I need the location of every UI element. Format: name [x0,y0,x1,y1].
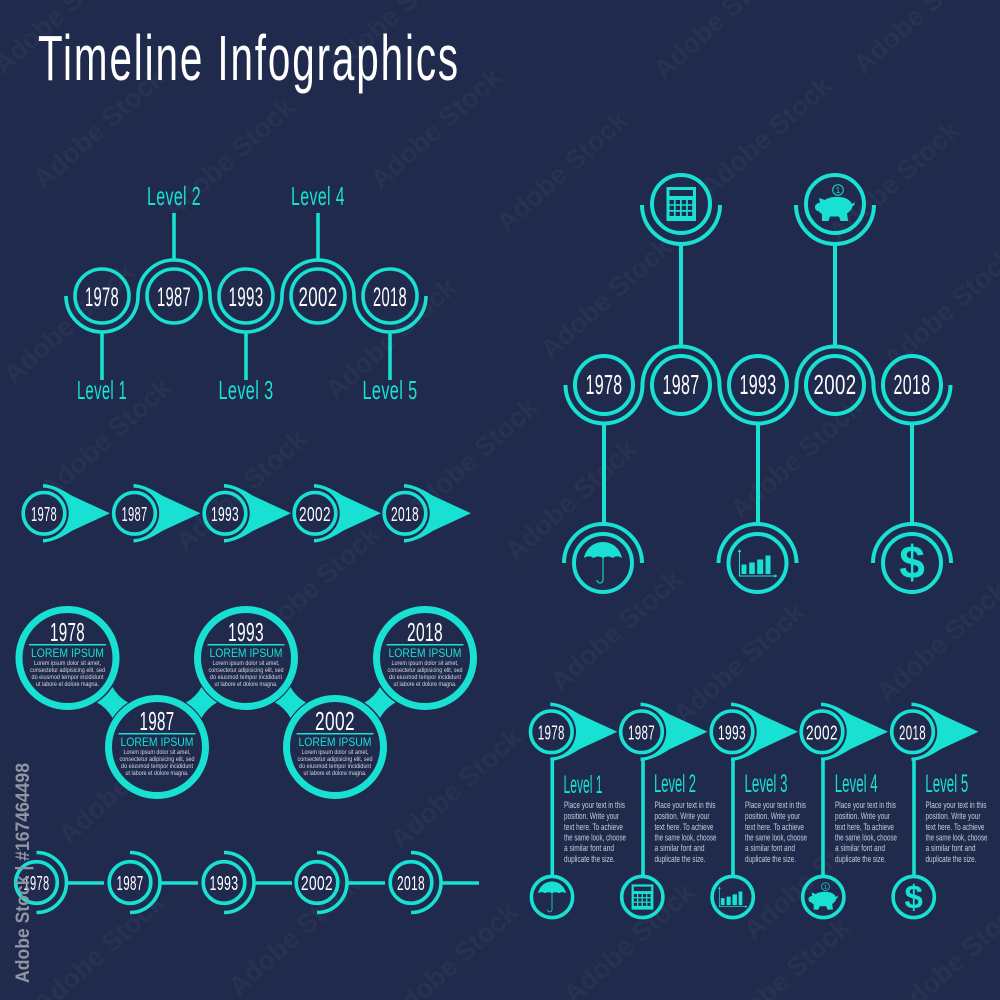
body text: position. Write your [564,811,619,822]
arrow 2018 [892,702,978,761]
year 1978 [575,356,633,414]
column 5 [892,702,988,918]
body text: the same look, choose [654,832,716,844]
stem [641,758,645,876]
arrow 2018: 2018 [391,504,419,526]
arrow 1978: 1978 [31,504,57,526]
column 4 [801,702,897,918]
circle 1987: consectetur adipisicing elit, sed [120,756,195,763]
circle 2018: 2018 [407,617,443,647]
title: Timeline Infographics [38,22,460,94]
year 1993: 1993 [740,369,776,400]
circle 1978: consectetur adipisicing elit, sed [30,667,105,674]
body text: a similar font and [926,843,976,854]
stock id watermark: Adobe Stock | #167464498 [12,763,34,983]
circle 1987: 1987 [140,706,174,736]
arrow 1978 [23,484,110,543]
circle 1978: Lorem ipsum dolor sit amet, [34,660,101,667]
arrow 2018: 2018 [899,722,926,744]
wave line [66,260,426,332]
stem [731,758,735,876]
watermark pattern: Adobe Stock [35,371,178,505]
circle 2018: ut labore et dolore magna. [394,681,457,688]
watermark pattern: Adobe Stock [223,868,366,1000]
body text [926,800,988,865]
year 1987 [147,269,201,323]
panel: arrow timeline [23,484,471,543]
icon: calculator [622,876,663,918]
icon: umbrella [531,876,573,918]
year 1987 [652,356,710,414]
arrow 1987: 1987 [122,504,148,526]
circle 2002: ut labore et dolore magna. [304,770,367,777]
circle 2018: do eiusmod tempor incididunt [389,674,461,681]
watermark pattern: Adobe Stock [725,391,868,525]
column 2 [621,702,716,918]
circle 2018: consectetur adipisicing elit, sed [388,667,463,674]
circle 2002: LOREM IPSUM [298,735,372,749]
year 1993: 1993 [228,282,264,312]
circle 1987: ut labore et dolore magna. [126,770,189,777]
node 1987 [109,852,160,912]
level labels: Level 2 [147,181,201,211]
circle 1993 [198,610,294,706]
year 1993 [219,269,273,323]
year 1978 [75,269,129,323]
arrow 2002 [294,484,381,543]
arrow 2002: 2002 [299,504,331,526]
body text: duplicate the size. [654,854,706,865]
level labels: Level 4 [291,181,345,211]
year 2002 [291,269,345,323]
body text [745,800,807,865]
watermark pattern: Adobe Stock [53,716,196,850]
watermark pattern: Adobe Stock [491,104,634,238]
watermark pattern: Adobe Stock [365,61,508,195]
panel: arrow timeline with text [530,702,988,918]
body text: a similar font and [654,843,704,854]
node 1978 [16,852,66,912]
body text: position. Write your [745,811,800,822]
body text: duplicate the size. [835,854,886,865]
panel: wave timeline with levels [66,181,426,405]
node 2002: 2002 [301,873,333,895]
body text: the same look, choose [745,832,807,844]
wave line [566,346,950,424]
body text: Place your text in this [835,800,896,811]
circle 1993: Lorem ipsum dolor sit amet, [212,660,280,667]
circle 2018 [376,610,474,706]
node 1978: 1978 [24,873,50,895]
connectors [604,245,912,524]
body text: a similar font and [835,843,885,854]
body text: duplicate the size. [745,854,796,865]
connector diamonds [97,687,396,718]
watermark pattern: Adobe Stock [738,811,881,945]
icon: bar chart [712,876,753,918]
year 1993 [729,356,787,414]
circle 1993: ut labore et dolore magna. [214,681,278,688]
circle 1978: 1978 [50,617,85,647]
level labels: Level 1 [77,375,127,405]
body text [835,800,897,865]
body text: text here. To achieve [835,822,894,833]
connectors [102,213,390,380]
year 2002 [806,356,864,414]
watermark pattern: Adobe Stock [535,231,678,365]
column 3 [711,702,807,918]
icon: dollar: $ [899,536,925,588]
body text: duplicate the size. [564,854,615,865]
watermark pattern: Adobe Stock [668,596,811,730]
circle 1987: Lorem ipsum dolor sit amet, [124,749,191,756]
panel: wave timeline with icons [564,175,951,592]
arrow 1978: 1978 [538,722,565,744]
heading: Level 3 [744,770,788,798]
body text: position. Write your [835,811,890,822]
heading: Level 2 [654,770,696,798]
level labels: Level 3 [218,375,274,405]
body text: position. Write your [654,811,710,822]
arrow 1987: 1987 [628,722,655,744]
watermark pattern: Adobe Stock [823,114,966,248]
year 1978: 1978 [586,369,622,400]
watermark pattern: Adobe Stock [158,91,301,225]
circle 1993: 1993 [228,617,264,647]
body text: the same look, choose [564,832,626,844]
icon: dollar [893,876,934,918]
level labels [77,181,418,405]
body text: the same look, choose [835,832,897,844]
body text: text here. To achieve [745,822,804,833]
icon: piggy bank [796,175,874,244]
stem [912,758,916,876]
node 2018: 2018 [397,873,425,895]
stem [821,758,825,876]
watermark pattern: Adobe Stock [500,433,643,567]
body text: a similar font and [564,843,614,854]
circle 1987 [108,698,206,796]
circle 2018: Lorem ipsum dolor sit amet, [392,660,459,667]
column 1 [530,702,626,918]
arrow 2002: 2002 [806,722,838,744]
body text: duplicate the size. [926,854,976,865]
panel: text circles [19,610,474,796]
icon: dollar [873,524,951,592]
node 1993: 1993 [210,873,238,895]
arrow 1993 [204,484,291,543]
year 2018 [883,356,941,414]
watermark pattern: Adobe Stock [545,563,688,697]
circle 2002 [286,698,384,796]
circle 1978 [19,610,116,706]
connecting lines [67,881,479,885]
watermark pattern: Adobe Stock [320,271,463,405]
arrow 1987 [621,702,708,761]
column 1: Level 1 [564,771,602,799]
watermark pattern: Adobe Stock [401,391,544,525]
arrow 1987 [114,484,200,543]
year 2018: 2018 [373,282,407,312]
circle 1978: do eiusmod tempor incididunt [32,674,104,681]
circle 1978: ut labore et dolore magna. [36,681,99,688]
icon: dollar: $ [905,878,923,916]
circle 2018: LOREM IPSUM [388,646,462,660]
arrow 1993 [711,702,798,761]
circle 1987: LOREM IPSUM [120,735,194,749]
year 2002: 2002 [298,282,338,312]
node 1987: 1987 [116,873,144,895]
year 1987: 1987 [662,369,700,400]
circle 1993: LOREM IPSUM [210,646,282,660]
body text [654,800,716,865]
circle 2002: do eiusmod tempor incididunt [299,763,371,770]
body text: Place your text in this [745,800,806,811]
icon: piggy bank [803,876,844,918]
node 2002 [296,852,347,912]
arrow 2018 [384,484,471,543]
body text: Place your text in this [564,800,625,811]
watermark pattern: Adobe Stock [170,423,313,557]
watermark pattern: Adobe Stock [28,61,171,195]
watermark pattern: Adobe Stock [385,721,528,855]
year 2018: 2018 [894,369,930,400]
arrow 2002 [801,702,888,761]
circle 2002: consectetur adipisicing elit, sed [298,756,373,763]
circle 1993: consectetur adipisicing elit, sed [208,667,284,674]
circle 2002: 2002 [315,706,355,736]
icon: bar chart [718,524,796,592]
year 2018 [363,269,417,323]
watermark pattern: Adobe Stock [0,256,141,390]
watermark pattern: Adobe Stock [243,518,386,652]
node 2018 [390,852,441,912]
icon: umbrella [564,524,642,592]
body text [564,800,626,865]
level labels: Level 5 [362,375,418,405]
circle 1987: do eiusmod tempor incididunt [121,763,193,770]
arrow 1993: 1993 [211,504,239,526]
body text: text here. To achieve [654,822,714,833]
body text: text here. To achieve [564,822,623,833]
arrow 1978 [530,702,617,761]
arrow 1993: 1993 [718,722,746,744]
icon: calculator [642,175,720,244]
year 1978: 1978 [85,282,119,312]
body text: Place your text in this [654,800,716,811]
body text: a similar font and [745,843,795,854]
circle 1978: LOREM IPSUM [31,646,104,660]
node 1993 [203,852,254,912]
stem [550,758,554,876]
year 1987: 1987 [157,282,191,312]
circle 2002: Lorem ipsum dolor sit amet, [302,749,369,756]
year 2002: 2002 [814,369,856,400]
circle 1993: do eiusmod tempor incididunt [210,674,282,681]
heading: Level 4 [835,770,878,798]
panel: line timeline [16,852,479,912]
watermark pattern: Adobe Stock [695,69,838,203]
